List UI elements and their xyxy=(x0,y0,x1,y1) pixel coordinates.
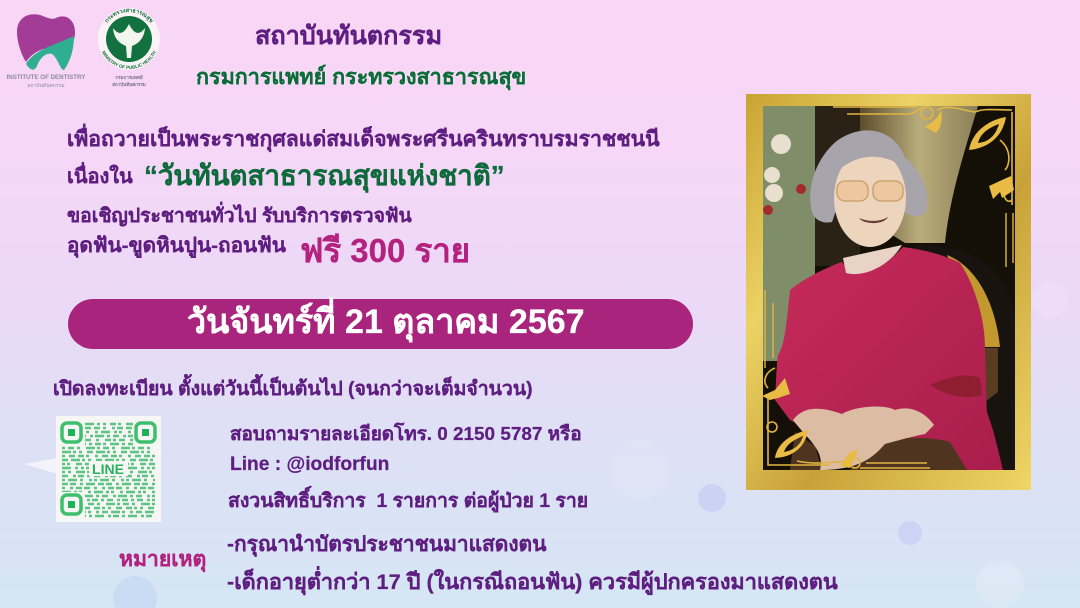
framed portrait xyxy=(746,94,1031,490)
heading: department: กรมการแพทย์ กระทรวงสาธารณสุข xyxy=(196,65,526,89)
heading: national dental public health day: “วันทันตสาธารณสุขแห่งชาติ” xyxy=(144,160,505,191)
qr code: line: LINE xyxy=(92,461,124,477)
gold leaves: bottom left xyxy=(762,378,858,468)
arms and hands xyxy=(793,407,934,470)
note: bring id card: -กรุณานำบัตรประชาชนมาแสดงตน xyxy=(227,533,546,556)
corner ornament: bottom left xyxy=(765,290,930,468)
text: services: อุดฟัน-ขูดหินปูน-ถอนฟัน xyxy=(67,234,286,257)
neck xyxy=(843,245,902,274)
date text: วันจันทร์ที่ 21 ตุลาคม 2567 xyxy=(187,303,585,341)
lap xyxy=(850,438,967,470)
text: occasion prefix: เนื่องใน xyxy=(67,166,133,188)
text: royal dedication: เพื่อถวายเป็นพระราชกุศลแด่สมเด็จพระศรีนครินทราบรมราชชนนี xyxy=(67,128,660,151)
heading: institute name: สถาบันทันตกรรม xyxy=(255,22,442,50)
chair xyxy=(915,245,1015,470)
corner ornament: top right xyxy=(833,107,1013,267)
gold frame xyxy=(746,94,1031,490)
smile xyxy=(859,217,888,223)
note: guardian for minors: -เด็กอายุต่ำกว่า 17 ปี (ในกรณีถอนฟัน) ควรมีผู้ปกครองมาแสดงตน xyxy=(227,569,838,594)
photo xyxy=(763,106,1015,470)
text: registration open: เปิดลงทะเบียน ตั้งแต่วันนี้เป็นต้นไป (จนกว่าจะเต็มจำนวน) xyxy=(53,378,533,400)
logo: institute of dentistry: INSTITUTE OF DENTISTRY xyxy=(7,74,86,81)
dress xyxy=(775,247,1003,470)
text: phone enquiry: สอบถามรายละเอียดโทร. 0 2150 5787 หรือ xyxy=(230,424,582,445)
highlight: free for 300 people: ฟรี 300 ราย xyxy=(300,232,470,269)
logo: ministry of public health xyxy=(98,8,160,87)
text: line id: Line : @iodforfun xyxy=(230,454,389,475)
logo: ministry of public health: กระทรวงสาธารณสุข xyxy=(105,8,153,23)
glasses xyxy=(837,181,903,201)
face xyxy=(834,149,906,247)
text: invitation: ขอเชิญประชาชนทั่วไป รับบริการตรวจฟัน xyxy=(67,206,412,227)
date banner xyxy=(68,299,693,349)
logo: institute of dentistry xyxy=(7,14,86,89)
logo: ministry of public health: MINISTRY OF PUBLIC HEALTH xyxy=(102,50,156,69)
logo: institute of dentistry: สถาบันทันตกรรม xyxy=(27,83,65,89)
qr code: line xyxy=(56,416,161,522)
label: remarks: หมายเหตุ xyxy=(119,548,206,571)
logo: ministry of public health: กรมการแพทย์ xyxy=(115,74,143,80)
hair xyxy=(810,130,928,223)
text: rights condition: สงวนสิทธิ์บริการ 1 รายการ ต่อผู้ป่วย 1 ราย xyxy=(228,490,588,512)
gold leaves: top right xyxy=(925,110,1014,199)
logo: ministry of public health: สถาบันทันตกรรม xyxy=(112,82,146,87)
hair fringe xyxy=(842,149,894,168)
